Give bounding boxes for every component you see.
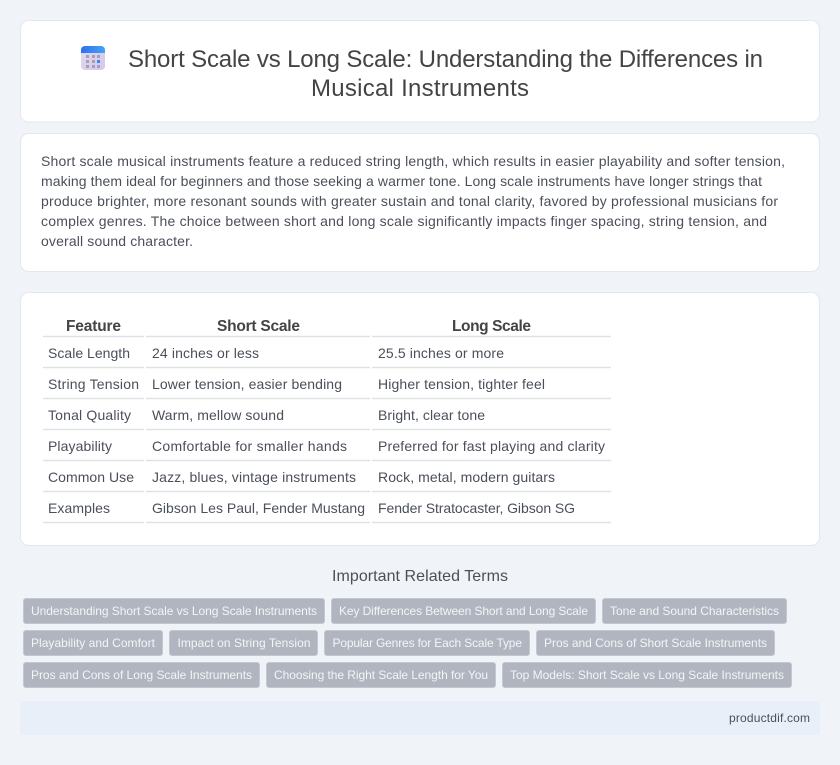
panel: intro text: making them ideal for beginners and those seeking a warmer tone. Long scale instruments have longer strings that	[41, 173, 762, 189]
tag	[324, 630, 530, 656]
row: tonal quality: Bright, clear tone	[378, 407, 485, 423]
row: scale length	[48, 345, 504, 361]
row: common use: Common Use	[48, 469, 134, 485]
heading: important related terms: Important Related Terms	[332, 568, 508, 585]
panel: intro text: produce brighter, more resonant sounds with greater sustain and tonal clarity, favored by professional musicians for	[41, 193, 778, 209]
row: common use: Rock, metal, modern guitars	[378, 469, 555, 485]
tag: Tone and Sound Characteristics	[610, 604, 779, 618]
row: scale length: 25.5 inches or more	[378, 345, 504, 361]
tag	[24, 662, 260, 688]
tag	[170, 630, 318, 656]
footer: productdif.com	[729, 711, 810, 725]
tag: Choosing the Right Scale Length for You	[274, 668, 488, 682]
row: tonal quality: Tonal Quality	[48, 407, 131, 423]
row: playability	[48, 438, 605, 454]
title: Musical Instruments	[311, 75, 529, 102]
row: playability: Preferred for fast playing and clarity	[378, 438, 605, 454]
row: examples: Fender Stratocaster, Gibson SG	[378, 500, 575, 516]
tag	[536, 630, 774, 656]
panel: intro text	[20, 134, 820, 272]
tag: Understanding Short Scale vs Long Scale Instruments	[31, 604, 317, 618]
tag	[24, 598, 324, 624]
row: examples: Gibson Les Paul, Fender Mustang	[152, 500, 365, 516]
tag	[266, 662, 496, 688]
panel: header	[20, 20, 820, 122]
tag	[24, 630, 162, 656]
row: string tension	[48, 376, 545, 392]
panel: comparison table	[20, 292, 820, 546]
row: common use	[48, 469, 555, 485]
row: playability: Comfortable for smaller hands	[152, 438, 347, 454]
row: scale length: 24 inches or less	[152, 345, 259, 361]
table header: Short Scale	[217, 318, 300, 335]
title: Short Scale vs Long Scale: Understanding the Differences in	[128, 46, 763, 73]
tag: Key Differences Between Short and Long Scale	[339, 604, 588, 618]
tag: Top Models: Short Scale vs Long Scale Instruments	[510, 668, 784, 682]
row: scale length: Scale Length	[48, 345, 130, 361]
tag	[502, 662, 792, 688]
icon: calendar grid	[81, 46, 105, 70]
related terms tags	[24, 598, 792, 688]
row: examples: Examples	[48, 500, 110, 516]
row: tonal quality: Warm, mellow sound	[152, 407, 284, 423]
table header: Feature	[66, 318, 121, 335]
tag: Popular Genres for Each Scale Type	[332, 636, 522, 650]
table header	[66, 318, 531, 335]
tag	[332, 598, 596, 624]
row: examples	[48, 500, 575, 516]
row: tonal quality	[48, 407, 485, 423]
title	[128, 46, 763, 102]
row: playability: Playability	[48, 438, 112, 454]
tag: Pros and Cons of Long Scale Instruments	[31, 668, 252, 682]
row: common use: Jazz, blues, vintage instruments	[152, 469, 356, 485]
table header: Long Scale	[452, 318, 531, 335]
row: string tension: String Tension	[48, 376, 139, 392]
tag	[602, 598, 786, 624]
footer	[20, 701, 820, 735]
panel: intro text: Short scale musical instruments feature a reduced string length, which results in easier playability and softer tension,	[41, 153, 785, 169]
tag: Playability and Comfort	[31, 636, 156, 650]
panel: intro text: complex genres. The choice between short and long scale significantly impacts finger spacing, string tension, and	[41, 213, 767, 229]
row: string tension: Lower tension, easier bending	[152, 376, 342, 392]
tag: Impact on String Tension	[178, 636, 310, 650]
panel: intro text: overall sound character.	[41, 233, 193, 249]
row: string tension: Higher tension, tighter feel	[378, 376, 545, 392]
tag: Pros and Cons of Short Scale Instruments	[544, 636, 767, 650]
